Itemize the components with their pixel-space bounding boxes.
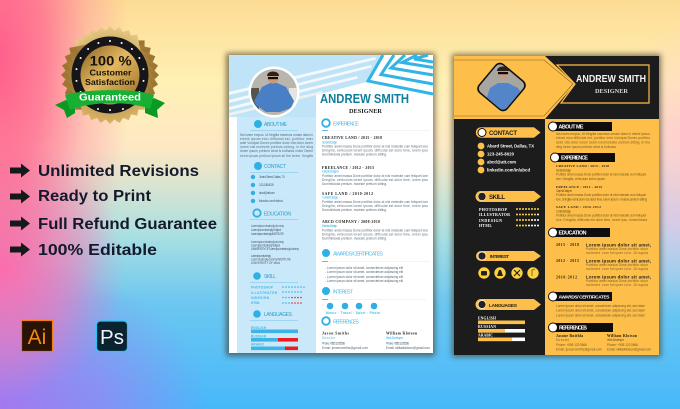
sidebar: education: Lorem ipsum is simply Subject: [251, 228, 281, 232]
sidebar: languages: ARABIC: [251, 342, 265, 346]
job: safe land: Dummiidoda pretium. molesie pretium sitting.: [322, 208, 387, 212]
main: interest: INTEREST: [333, 290, 354, 296]
job: creative land: Porttitor amet massa Done porttitor dolor at nisl molestie cum feliquet lore: [322, 144, 428, 148]
about me section: eleum eiun difficulat est, porttitor inter Volutpat Donec porttitor: [556, 136, 651, 140]
references section: Director: [556, 338, 570, 342]
badge text: 100 %: [90, 53, 132, 69]
icon: illustrator: Ai: [28, 326, 46, 349]
main: references: REFERENCES: [333, 320, 359, 326]
sidebar: about me: ABOUT ME: [264, 122, 288, 128]
resume: light blue template: [229, 55, 433, 353]
references section: Jasone Rnithla: [556, 334, 583, 338]
sidebar: education: Lorem is simply dummy INSTITUTE: [251, 258, 291, 262]
experience section: lore. Dringilla vehiculum est dolor time, lorem ipsum. molesie pretium sitting: [556, 198, 647, 202]
job: safe land: SAFE LAND / 2010-2012: [322, 192, 373, 196]
awards section: [548, 292, 645, 318]
main: awards: [322, 249, 430, 283]
about me section: [548, 122, 651, 149]
sidebar: contact: linkedin.com/in/abcd: [259, 199, 283, 203]
job: creative land: [322, 136, 428, 156]
experience section: Senior UI Design: [556, 168, 571, 172]
yellow header arrow: [454, 56, 575, 119]
experience section: lore. Dringilla, vehiculum lorem ipsum.: [556, 177, 606, 181]
education rows: [556, 242, 651, 287]
contact section: [476, 127, 541, 173]
experience section: lore. Dringilla, difficulat est dolor time, lorem ipsu, dummiidoda: [556, 218, 647, 222]
skill section: INDESIGN: [479, 218, 502, 223]
sidebar: contact: Jinard Street, Dallas, TX: [259, 175, 286, 179]
profile photo: [248, 66, 300, 118]
main: references: [322, 317, 430, 350]
main: interest: Music · Travel · Sport · Photo: [326, 311, 380, 315]
name and role: ANDREW SMITH: [320, 91, 409, 106]
badge gold burst: [61, 26, 159, 124]
references section: Phone: +555 123 5566: [607, 343, 638, 347]
icon: illustrator: [22, 320, 52, 352]
sidebar: languages: LANGUAGES: [264, 312, 293, 318]
sidebar: education: UNIVERSITY OF Lorem ipsum is simply dummy: [251, 247, 299, 251]
sidebar: skill: PHOTOSHOP: [251, 286, 274, 290]
about me section: ding lorem ipsum pretium what is bulhaiss: [556, 145, 616, 149]
name panel: ANDREW SMITH: [576, 73, 646, 85]
education rows: Lorem ipsum dolor sit amet,: [586, 274, 651, 280]
languages section: ARABIC: [478, 334, 493, 338]
education section: EDUCATION: [558, 230, 587, 236]
job: creative land: Dringilla, vehiculum lorem ipsum, difficulat est dolor time, lorem ipsu: [322, 148, 428, 152]
experience section: Graphic Designer: [556, 189, 573, 193]
education rows: molestie cum feliquet lore. Dringilla: [586, 283, 648, 287]
main: experience: EXPERIENCE: [333, 122, 359, 128]
job: abcd company: ABCD COMPANY / 2008-2010: [322, 220, 380, 224]
languages section: ENGLISH: [478, 316, 496, 320]
experience section: CREATIVE LAND / 2015 - 2018: [556, 164, 609, 168]
sidebar: about me: lorem ipsum pretium ipsum all the lorem. Ibngitis: [240, 154, 313, 158]
main: awards: - Lorem ipsum dolor sit amet, consectetuer adipiscing elit: [325, 279, 403, 283]
icon: photoshop: [96, 321, 128, 352]
experience section: SAFE LAND / 2010-2012: [556, 205, 601, 209]
job: freelance: FREELANCE / 2012 - 2015: [322, 166, 374, 170]
skill section: HTML: [479, 223, 492, 228]
sidebar: contact: abcd@att.com: [259, 191, 275, 195]
references section: Phone: +555 123 5566: [556, 343, 587, 347]
satisfaction badge: [55, 26, 165, 124]
right yellow panel: [545, 119, 659, 355]
item: full refund guarantee: Full Refund Guarantee: [38, 216, 217, 233]
sidebar: contact: CONTACT: [264, 164, 286, 170]
job: freelance: [322, 166, 428, 186]
sidebar: education: Lorem ipsum is simply dummy: [251, 224, 284, 228]
experience section: Porttitor amet massa Done porttitor dolor at nisl molestie cum feliquet: [556, 172, 646, 176]
sidebar: education: EDUCATION: [264, 212, 291, 218]
references section: Web Developer: [607, 338, 625, 342]
sidebar: about me: eleele ipsum eiun difficulat est, porttitor inter: [240, 137, 314, 141]
resume shadows: [226, 53, 661, 357]
main: references: Phone: +555 123 5566: [322, 342, 345, 346]
badge text: [85, 53, 135, 87]
sidebar: about me: ante Volutpat Donec porttitor dolor vita dolor lorem: [240, 141, 313, 145]
references section: [548, 323, 651, 352]
job: safe land: Content Design: [322, 196, 338, 200]
sidebar: about me: Nis lorem empus. Ut fringilla maximus ornare diam in: [240, 133, 313, 137]
interest section: [476, 251, 541, 279]
sidebar: skill: INDESIGN: [251, 296, 270, 300]
profile photo: [477, 62, 526, 112]
sidebar: skill: [250, 272, 305, 305]
job: creative land: Dummiidoda pretium. molesie pretium sitting.: [322, 152, 387, 156]
item: ready to print: Ready to Print: [38, 188, 151, 205]
education rows: molestie cum feliquet lore. Dringilla: [586, 251, 648, 255]
badge dark ring: [72, 36, 148, 114]
skill section: SKILL: [489, 195, 505, 201]
sidebar: languages: ENGLISH: [251, 326, 267, 330]
references section: William Klotson: [607, 334, 637, 338]
item: 100% editable: 100% Editable: [38, 242, 157, 259]
sidebar: contact: [250, 162, 298, 203]
experience section: FREELANCE / 2012 - 2015: [556, 185, 602, 189]
education rows: 2010-2012: [556, 276, 577, 280]
contact section: CONTACT: [489, 131, 517, 137]
awards section: Lorem ipsum dolor sit amet, consetetuer adipiscing elit, sed diam: [556, 314, 645, 318]
experience section: Porttitor amet massa Done porttitor dolor at nisl molestie cum feliquet: [556, 214, 646, 218]
education rows: molestie cum feliquet lore. Dringilla: [586, 267, 648, 271]
main: references: Phone: +555 123 5566: [386, 342, 409, 346]
sidebar: education: Lorem ipsum is simply: [251, 254, 271, 258]
main: awards: - Lorem ipsum dolor sit amet, consectetuer adipiscing elit: [325, 275, 403, 279]
education rows: Porttitor amet massa Done porttitor dolor: [586, 247, 649, 251]
about me section: Nis lorem empus. Ut fringilla maximus ornare diam in eleele ipsum: [556, 132, 650, 136]
main: references: Director: [322, 336, 336, 340]
sidebar: about me: [240, 120, 314, 158]
badge text: Satisfaction: [85, 78, 135, 87]
languages section: RUSSIAN: [478, 325, 496, 329]
about me section: dolor vita dolor lorem lorem nisl molestie pretium sitting. In the: [556, 140, 650, 144]
guaranteed ribbon: Guaranteed: [79, 93, 141, 104]
education rows: Lorem ipsum dolor sit amet,: [586, 258, 651, 264]
experience section: Porttitor amet massa Done porttitor dolor at nisl molestie cum feliquet: [556, 193, 646, 197]
skill section: PHOTOSHOP: [479, 207, 508, 212]
skill dots: [282, 286, 305, 304]
education rows: 2012 - 2015: [556, 259, 579, 263]
education rows: Porttitor amet massa Done porttitor dolor: [586, 263, 649, 267]
main: references: Email: williadklotson@gmail.com: [386, 346, 430, 350]
about me section: ABOUT ME: [558, 124, 584, 130]
job: safe land: Porttitor amet massa Done porttitor dolor at nisl molestie cum feliquet lore: [322, 200, 428, 204]
education rows: Lorem ipsum dolor sit amet,: [586, 242, 651, 248]
name panel: [557, 65, 649, 103]
main: interest: [322, 287, 426, 315]
main: references: Web Developer: [386, 336, 404, 340]
job: freelance: Graphic Designer: [322, 170, 340, 174]
contact section: 123-245-8020: [487, 152, 515, 156]
references section: REFERENCES: [559, 326, 587, 332]
sidebar: education: Lorem ipsum is simply INSTITUTE: [251, 232, 284, 236]
sidebar: contact: 123-245-8020: [259, 183, 274, 187]
languages section: LANGUAGES: [489, 303, 518, 309]
skill dots: [516, 208, 539, 226]
sidebar: languages: RUSSIAN: [251, 334, 267, 338]
sidebar: education: Lorem ipsum is simply Subject: [251, 244, 280, 248]
skill section: [476, 191, 541, 228]
sidebar: education: [250, 209, 299, 265]
experience section: Content Design: [556, 210, 571, 214]
job: freelance: Porttitor amet massa Done porttitor dolor at nisl molestie cum feliquet lore: [322, 174, 428, 178]
job: abcd company: Porttitor amet massa Done porttitor dolor at nisl molestie cum feliquet lore: [322, 228, 428, 232]
sidebar: education: Lorem ipsum is simply dummy: [251, 240, 284, 244]
main: experience: [322, 119, 430, 240]
item: unlimited revisions: Unlimited Revisions: [38, 163, 199, 180]
experience section: [550, 153, 647, 222]
main: references: William Klotson: [386, 332, 418, 336]
job: abcd company: Dringilla, vehiculum lorem ipsum, difficulat est dolor time, lorem ipsu: [322, 232, 428, 236]
main: references: Jason Smiths: [322, 332, 350, 336]
sidebar: languages: [250, 310, 298, 350]
awards section: Lorem ipsum dolor sit amet, consetetuer adipiscing elit, sed diam: [556, 304, 645, 308]
job: creative land: CREATIVE LAND / 2015 - 2018: [322, 136, 382, 140]
education rows: Porttitor amet massa Done porttitor dolor: [586, 279, 649, 283]
contact section: abcd@att.com: [487, 160, 516, 164]
job: creative land: Senior UI Design: [322, 140, 337, 144]
name and role: [320, 91, 409, 115]
main: references: Email: jensenzmiths@gmail.com: [322, 346, 368, 350]
job: safe land: [322, 192, 428, 212]
job: abcd company: Fashion Design: [322, 224, 337, 228]
references section: Email: williadklotson@gmail.com: [607, 348, 651, 352]
experience section: EXPERIENCE: [561, 156, 588, 162]
left sidebar: [237, 117, 316, 353]
name and role: DESIGNER: [349, 109, 383, 115]
skill section: ILLUSTRATOR: [479, 212, 510, 217]
job: abcd company: Dummiidoda pretium. molesie pretium sitting.: [322, 236, 387, 240]
awards section: Lorem ipsum dolor sit amet, consetetuer adipiscing elit, sed diam: [556, 308, 645, 312]
feature list: [10, 163, 217, 259]
awards section: AWARDS/ CERTIFICATES: [558, 294, 610, 300]
job: abcd company: [322, 220, 428, 240]
education rows: 2015 - 2018: [556, 243, 579, 247]
sidebar: about me: lorem ipsum pretium what is bulhaiss niuler Deem: [240, 149, 313, 153]
main: awards: - Lorem ipsum dolor sit amet, consectetuer adipiscing elit: [325, 266, 403, 270]
education section: [548, 228, 651, 287]
sidebar: about me: lorem nisl molestie pretium cutting. In the ding: [240, 145, 313, 149]
sidebar: skill: SKILL: [264, 274, 276, 280]
name panel: DESIGNER: [595, 89, 629, 95]
contact section: linkedin.com/in/abcd: [487, 168, 530, 172]
contact section: Abard Street, Dallas, TX: [487, 144, 534, 148]
references section: Email: jensensmiths@gmail.com: [556, 348, 602, 352]
interest section: INTEREST: [490, 254, 509, 259]
languages section: [476, 299, 541, 341]
sidebar: skill: HTML: [251, 301, 260, 305]
job: freelance: Dringilla, vehiculum lorem ipsum, difficulat est dolor time, lorem ipsu: [322, 178, 428, 182]
job: safe land: Dringilla, vehiculum lorem ipsum, difficulat est dolor time, lorem ipsu: [322, 204, 428, 208]
header diagonal shapes: [229, 55, 433, 117]
sidebar: education: UNIVERSITY OF abcd: [251, 261, 280, 265]
sidebar: skill: ILLUSTRATOR: [251, 291, 278, 295]
job: freelance: Dummiidoda pretium. molesie pretium sitting.: [322, 182, 387, 186]
icon: photoshop: Ps: [100, 326, 124, 349]
white panel under chevrons: [316, 55, 433, 118]
main: awards: AWARDS/ CERTIFICATES: [333, 252, 383, 258]
header chevrons: [368, 55, 433, 94]
main: awards: - Lorem ipsum dolor sit amet, consectetuer adipiscing elit: [325, 270, 403, 274]
resume: black and yellow template: [454, 56, 659, 355]
badge text: Customer: [90, 69, 132, 78]
